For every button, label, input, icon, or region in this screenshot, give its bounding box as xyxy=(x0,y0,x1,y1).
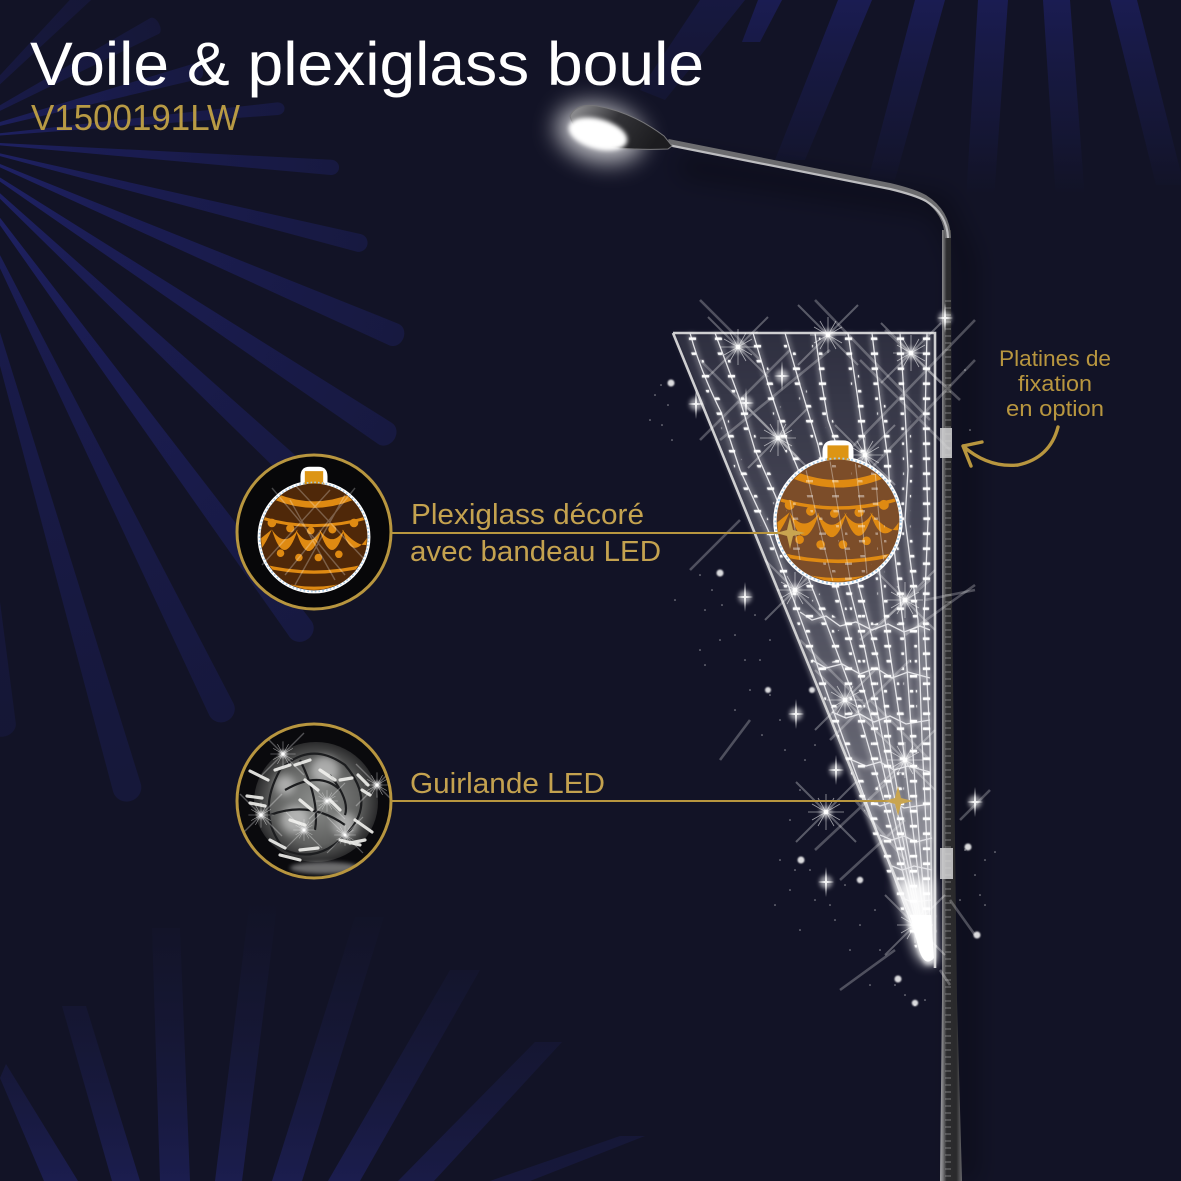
background rays: top xyxy=(640,0,1181,200)
glow dots xyxy=(668,380,980,1006)
sparkles xyxy=(688,303,983,955)
lamp glow xyxy=(551,95,649,171)
leader line: plexiglass xyxy=(391,517,805,549)
arrow to bracket xyxy=(963,427,1058,466)
garland cluster xyxy=(254,742,378,862)
garland leds xyxy=(247,760,372,860)
street lamp xyxy=(551,95,965,1181)
label: fixing plates: fixation xyxy=(1018,371,1092,396)
thumbnail ball xyxy=(257,467,371,592)
lamp arm xyxy=(668,142,948,238)
net glow xyxy=(673,333,935,965)
glitter dust xyxy=(650,370,995,1005)
gold star marker xyxy=(776,517,805,549)
callout: plexiglass thumbnail xyxy=(237,455,391,609)
callout: LED garland thumbnail xyxy=(237,724,398,878)
lamp head xyxy=(570,105,672,149)
background rays: bottom xyxy=(0,899,645,1181)
pole brackets xyxy=(940,428,953,879)
cross flares xyxy=(690,300,990,990)
label: fixing plates: en option xyxy=(1006,396,1104,421)
label: fixing plates: Platines de xyxy=(999,346,1111,371)
plexiglass ball xyxy=(773,440,903,584)
tip glow xyxy=(895,880,936,964)
light strands xyxy=(690,333,932,960)
product code: V1500191LW xyxy=(31,97,240,138)
lamp pole shaft xyxy=(940,230,962,1181)
sail frame xyxy=(673,333,935,968)
label: plexiglass: Plexiglass décoré xyxy=(411,499,644,531)
garland highlights xyxy=(275,756,357,837)
background rays: left burst xyxy=(0,0,408,805)
gold star marker xyxy=(884,786,913,816)
strand overlay on ball xyxy=(790,455,885,590)
pole speckle xyxy=(945,300,951,1181)
sail decoration xyxy=(650,300,995,1006)
label: garland: Guirlande LED xyxy=(410,768,605,800)
title: Voile & plexiglass boule xyxy=(30,30,704,98)
garland wires xyxy=(269,754,361,854)
label: bandeau LED: avec bandeau LED xyxy=(410,536,661,568)
thumbnail flares xyxy=(262,485,365,585)
lamp light xyxy=(565,112,631,156)
leader line: LED garland xyxy=(391,786,913,816)
label: fixing plates xyxy=(999,346,1111,421)
